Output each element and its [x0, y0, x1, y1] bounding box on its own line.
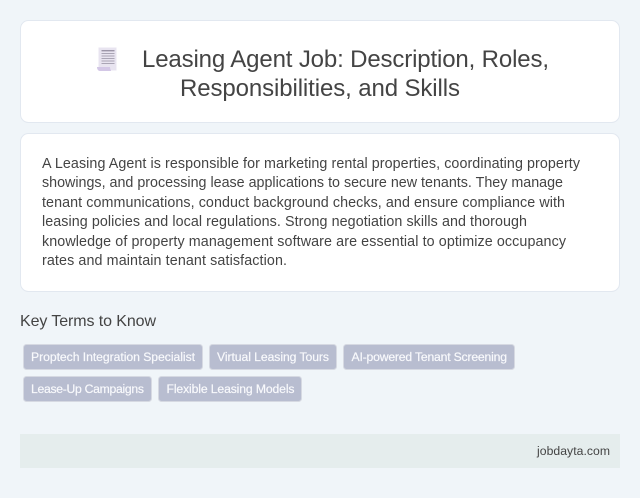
heading: key terms: Key Terms to Know	[20, 313, 156, 330]
description text: tenant communications, conduct background checks, and ensure compliance with	[42, 195, 565, 211]
description text: leasing policies and local regulations. Strong negotiation skills and thorough	[42, 214, 527, 230]
title: Leasing Agent Job: Description, Roles,	[142, 46, 549, 73]
description text: knowledge of property management software are essential to optimize occupancy	[42, 234, 567, 250]
panel: description	[20, 134, 620, 292]
tag: Lease-Up Campaigns	[24, 376, 152, 402]
description text: rates and maintain tenant satisfaction.	[42, 253, 287, 269]
tag: AI-powered Tenant Screening: AI-powered Tenant Screening	[352, 350, 507, 364]
tag: Virtual Leasing Tours	[210, 344, 336, 370]
tag: Flexible Leasing Models: Flexible Leasing Models	[166, 382, 294, 396]
icon: document scroll	[97, 48, 116, 71]
tag: AI-powered Tenant Screening	[344, 344, 514, 370]
title: Responsibilities, and Skills	[180, 75, 460, 102]
footer: jobdayta.com	[536, 444, 610, 458]
description text	[42, 156, 581, 269]
panel: header	[20, 20, 620, 122]
footer	[20, 434, 620, 468]
tag: Virtual Leasing Tours: Virtual Leasing Tours	[217, 350, 329, 364]
tag: Flexible Leasing Models	[158, 376, 302, 402]
title	[142, 46, 549, 102]
description text: A Leasing Agent is responsible for marketing rental properties, coordinating property	[42, 156, 581, 172]
tag: Lease-Up Campaigns: Lease-Up Campaigns	[31, 382, 144, 396]
tag: Proptech Integration Specialist: Proptech Integration Specialist	[31, 350, 196, 364]
description text: showings, and processing lease applications to secure new tenants. They manage	[42, 175, 563, 191]
tag: Proptech Integration Specialist	[24, 344, 202, 370]
